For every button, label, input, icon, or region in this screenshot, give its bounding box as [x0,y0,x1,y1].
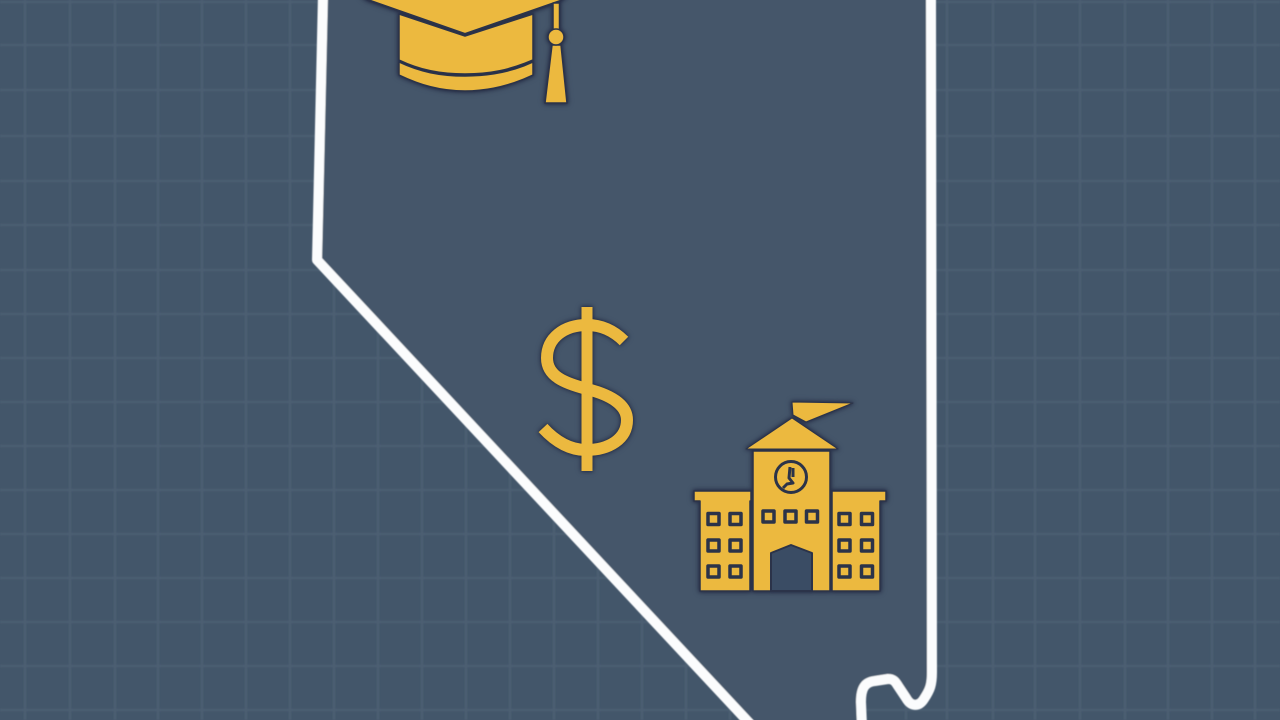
tassel [545,3,567,103]
door [771,545,812,591]
icon: school building [694,402,886,591]
cap body [399,14,533,74]
icon: graduation cap [362,0,567,103]
cap band [399,62,533,91]
right wing [832,491,886,591]
dollar S curve [543,325,627,450]
central tower [753,451,830,591]
roof [746,418,838,449]
left wing [694,491,751,591]
clock [776,462,806,492]
windows [708,511,872,577]
mortarboard [362,0,566,34]
Nevada state outline [317,0,932,720]
dollar bar [582,307,592,471]
icon: dollar sign [543,307,627,471]
flag [792,402,853,422]
